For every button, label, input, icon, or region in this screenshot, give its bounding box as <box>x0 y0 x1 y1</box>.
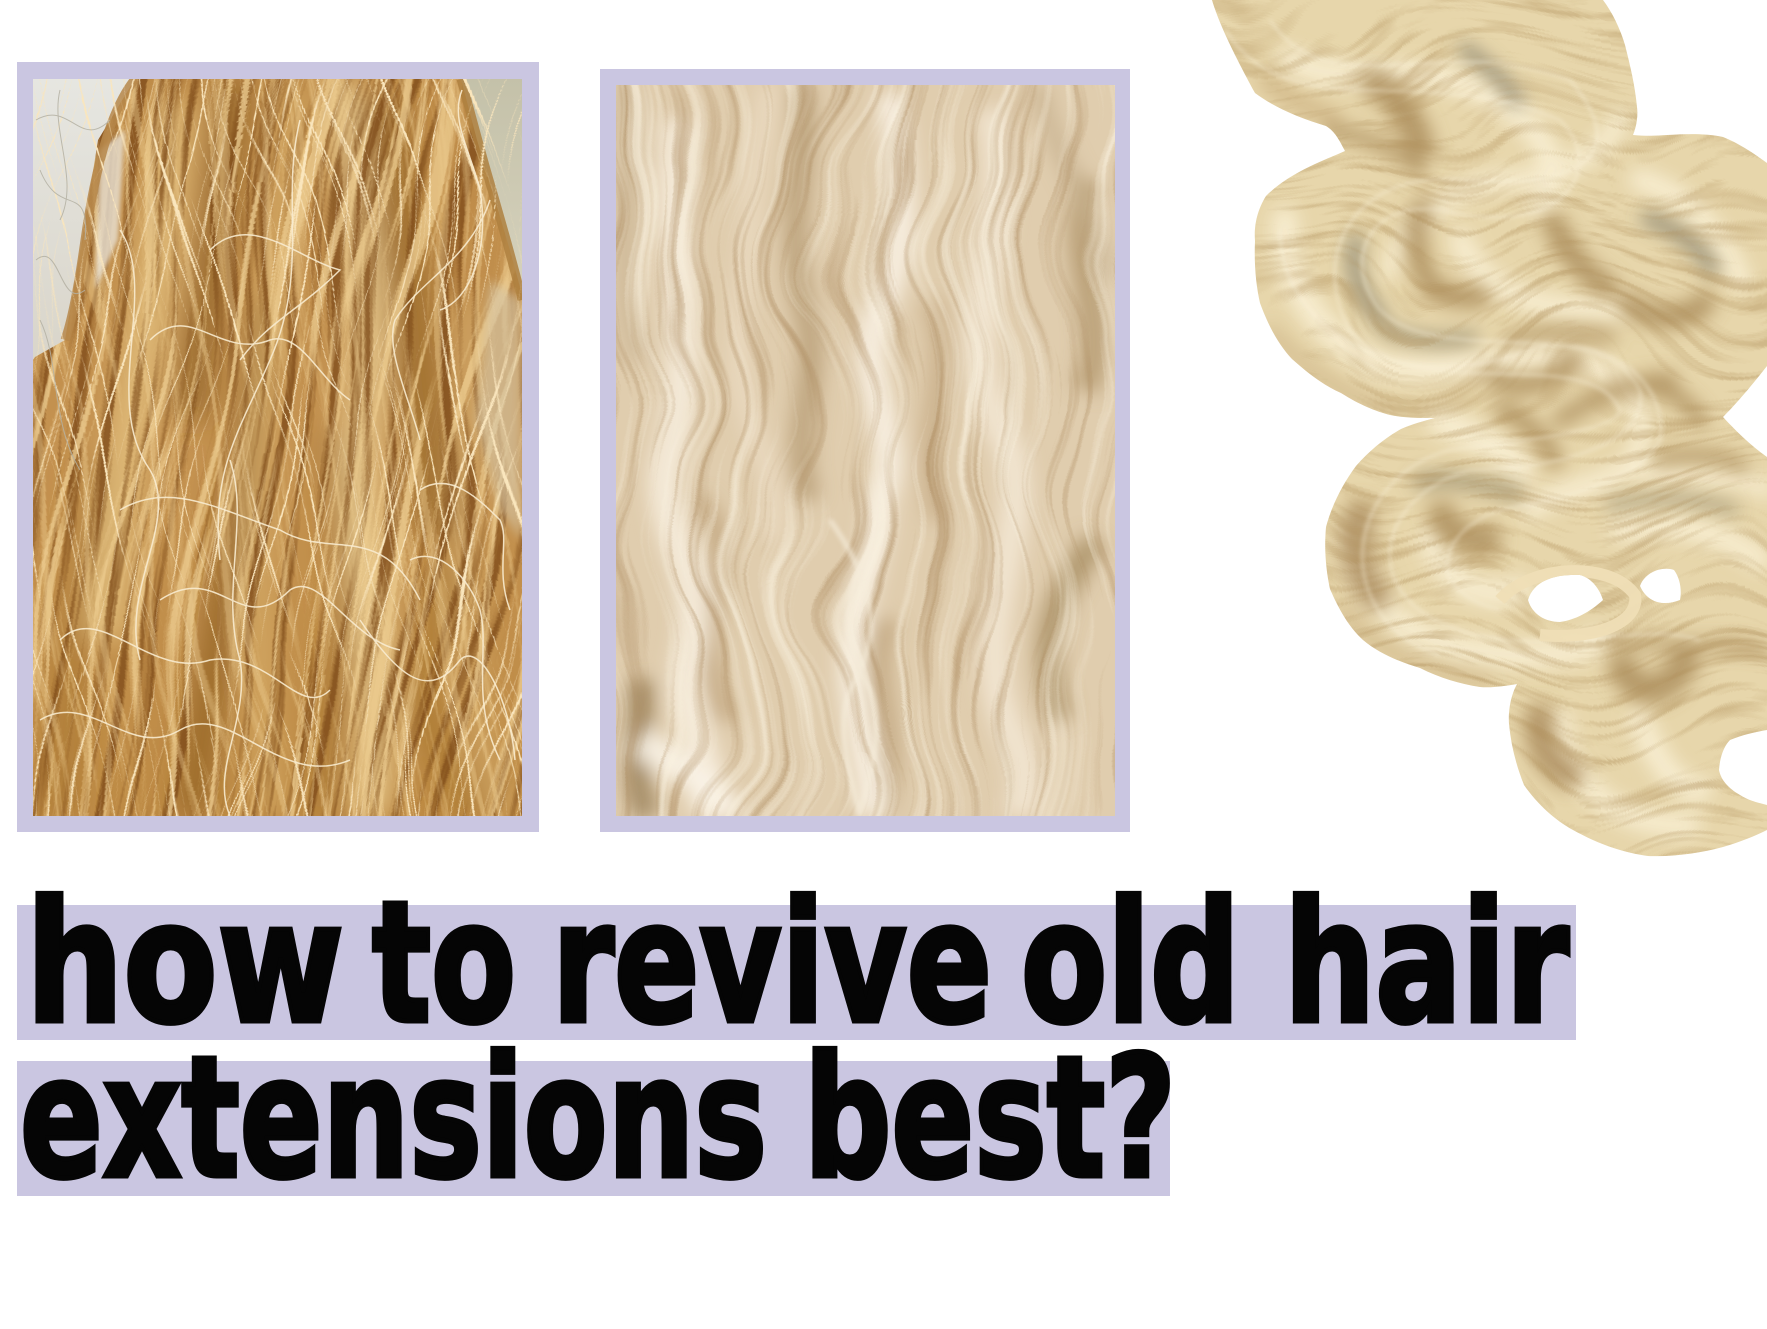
title highlight: line one <box>17 905 1576 1040</box>
panel: damaged hair photo <box>17 62 539 832</box>
image: smooth wavy blonde hair <box>616 85 1115 816</box>
frame: healthy hair lilac border <box>600 69 1130 832</box>
image: wavy blonde hair extension bundle <box>1212 0 1767 856</box>
image: dry frizzy golden hair <box>33 79 522 816</box>
title text: line one: revive <box>552 865 992 1061</box>
bright lit bands <box>1285 60 1767 825</box>
panel: healthy hair photo <box>600 69 1130 832</box>
title text: line one: hair <box>1284 865 1569 1061</box>
tan shaded folds <box>1265 50 1767 774</box>
title text: line one <box>26 865 1569 1061</box>
flowing strand lines <box>1225 20 1700 655</box>
loop curl <box>1500 571 1635 636</box>
title text: line two: best? <box>804 1020 1176 1216</box>
flyaway strands <box>33 79 522 816</box>
title text: line one: old <box>1021 865 1240 1061</box>
frame: damaged hair lilac border <box>17 62 539 832</box>
title text: line two: extensions <box>20 1020 767 1216</box>
background behind the hair <box>33 79 135 360</box>
twisted strand detail <box>830 520 885 816</box>
title <box>17 865 1576 1216</box>
title text: line one: how <box>26 865 344 1061</box>
title highlight: line two <box>17 1061 1170 1196</box>
title text: line one: to <box>372 865 516 1061</box>
